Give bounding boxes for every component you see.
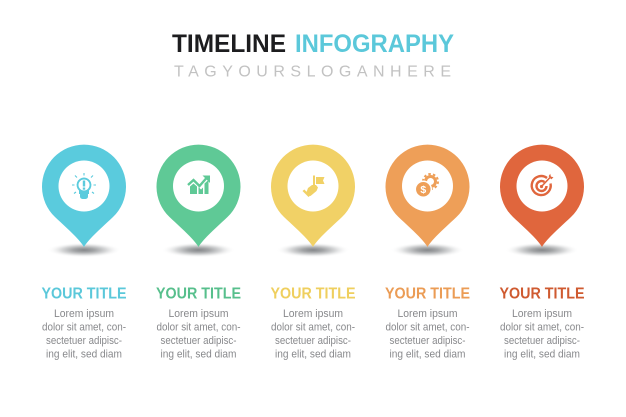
- body text: sectetuer adipisc-: [275, 335, 351, 347]
- panel: step 5: [500, 145, 585, 360]
- body text: ing elit, sed diam: [160, 348, 236, 360]
- body text: dolor sit amet, con-: [500, 322, 584, 334]
- body text: ing elit, sed diam: [504, 348, 580, 360]
- body text: sectetuer adipisc-: [504, 335, 580, 347]
- body text: ing elit, sed diam: [390, 348, 466, 360]
- pin: [157, 145, 240, 247]
- title: YOUR TITLE: [270, 286, 356, 302]
- body text: [42, 308, 126, 360]
- pin center: [173, 160, 224, 212]
- title: INFOGRAPHY: [295, 30, 454, 58]
- body text: sectetuer adipisc-: [390, 335, 466, 347]
- title: TIMELINE: [172, 30, 286, 58]
- body text: Lorem ipsum: [512, 308, 572, 320]
- body text: [271, 308, 355, 360]
- icon: light bulb: [72, 173, 96, 199]
- title: YOUR TITLE: [156, 286, 241, 302]
- body text: ing elit, sed diam: [275, 348, 351, 360]
- title: YOUR TITLE: [385, 286, 470, 302]
- icon: target: [532, 175, 552, 195]
- body text: dolor sit amet, con-: [42, 322, 126, 334]
- pin shadow: [162, 242, 236, 258]
- body text: Lorem ipsum: [54, 308, 114, 320]
- body text: Lorem ipsum: [398, 308, 458, 320]
- panel: step 4: [385, 145, 470, 360]
- body text: [386, 308, 470, 360]
- body text: ing elit, sed diam: [46, 348, 122, 360]
- title: YOUR TITLE: [42, 286, 127, 302]
- pin shadow: [47, 242, 121, 258]
- body text: Lorem ipsum: [283, 308, 343, 320]
- pin: [271, 145, 355, 247]
- pin: [42, 145, 126, 247]
- subtitle: TAGYOURSLOGANHERE: [174, 64, 451, 80]
- body text: sectetuer adipisc-: [46, 335, 122, 347]
- panel: step 1: [42, 145, 127, 360]
- pin center: [288, 160, 338, 212]
- body text: sectetuer adipisc-: [160, 335, 237, 347]
- body text: dolor sit amet, con-: [156, 322, 241, 334]
- icon: coin and gear: [415, 174, 438, 197]
- pin shadow: [505, 242, 579, 258]
- pin shadow: [390, 242, 464, 258]
- title: YOUR TITLE: [500, 286, 585, 302]
- body text: dolor sit amet, con-: [271, 322, 355, 334]
- pin: [500, 145, 584, 247]
- icon: growth chart: [188, 176, 210, 194]
- panel: step 3: [270, 145, 356, 360]
- body text: [500, 308, 584, 360]
- pin: [386, 145, 470, 247]
- icon: hand with flag: [302, 176, 324, 197]
- pin shadow: [276, 242, 350, 258]
- body text: [156, 308, 241, 360]
- body text: Lorem ipsum: [168, 308, 228, 320]
- pin center: [516, 160, 568, 212]
- panel: step 2: [156, 145, 241, 360]
- icon: coin and gear: $: [420, 184, 426, 196]
- pin center: [402, 160, 453, 212]
- pin center: [58, 160, 110, 212]
- title: [172, 30, 454, 58]
- body text: dolor sit amet, con-: [386, 322, 470, 334]
